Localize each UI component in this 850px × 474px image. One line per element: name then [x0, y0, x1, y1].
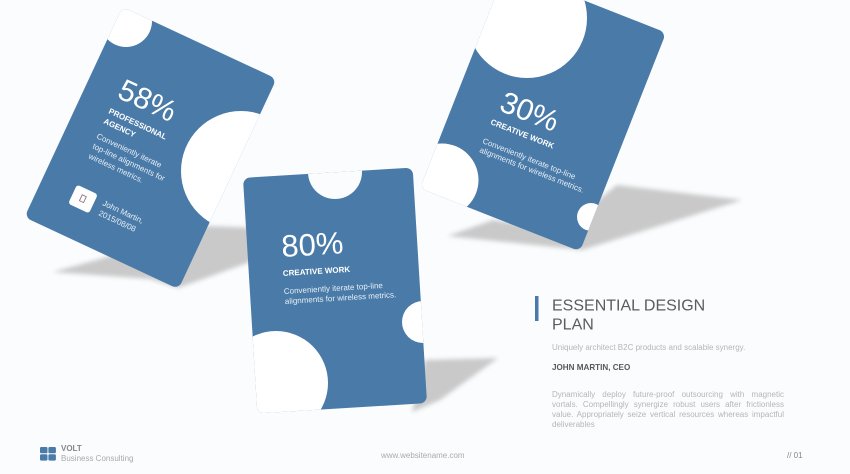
title: ESSENTIAL DESIGN	[552, 298, 705, 314]
icon: document badge	[68, 185, 98, 213]
body text 58%: wireless metrics.	[86, 151, 145, 185]
footer brand: Business Consulting	[61, 454, 133, 463]
card body 58%	[26, 9, 274, 287]
body text 58%: top-line alignments for	[91, 142, 167, 183]
panel: card 58%	[26, 9, 274, 287]
body text 80%: Conveniently iterate top-line	[284, 281, 384, 296]
panel: card 80%	[243, 168, 427, 413]
heading: professional agency: PROFESSIONAL	[107, 107, 168, 142]
description paragraph	[552, 390, 784, 429]
stat 30%: 30%	[495, 86, 563, 139]
shadow: card 1	[53, 226, 258, 288]
description paragraph: value. Appropriately seize vertical resources whereas impactful	[552, 410, 784, 419]
accent bar	[535, 296, 538, 321]
title	[552, 298, 705, 334]
footer brand	[61, 444, 133, 463]
description paragraph: vortals. Compellingly synergize robust users after frictionless	[552, 400, 784, 409]
author 58%	[97, 199, 145, 234]
body text 30%: alignments for wireless metrics.	[478, 145, 585, 195]
body text 80%: alignments for wireless metrics.	[285, 290, 397, 306]
panel: card 30%	[422, 0, 664, 250]
author 58%: 2015/08/08	[97, 209, 138, 234]
shadow: card 2	[412, 358, 498, 412]
footer website: www.websitename.com	[380, 451, 465, 460]
card body 80%	[243, 168, 427, 413]
body text 58%: Conveniently iterate	[95, 132, 164, 170]
stat 58%: 58%	[113, 73, 181, 129]
body text 80%	[284, 281, 397, 306]
description paragraph: Dynamically deploy future-proof outsourcing with magnetic	[552, 390, 784, 399]
body text 30%: Conveniently iterate top-line	[481, 136, 577, 181]
author name: JOHN MARTIN, CEO	[552, 363, 630, 372]
subtitle: Uniquely architect B2C products and scalable synergy.	[552, 343, 745, 352]
footer logo icon	[40, 447, 56, 461]
description paragraph: deliverables	[552, 420, 595, 429]
stat 80%: 80%	[280, 225, 344, 264]
heading: professional agency: AGENCY	[102, 117, 138, 140]
title: PLAN	[552, 316, 594, 334]
heading: creative work 30%: CREATIVE WORK	[489, 117, 555, 151]
card body 30%	[422, 0, 664, 250]
footer brand: VOLT	[61, 444, 82, 453]
shadow: card 3	[448, 185, 742, 250]
heading: creative work 80%: CREATIVE WORK	[283, 265, 351, 278]
author 58%: John Martin,	[101, 199, 145, 225]
page number: // 01	[787, 451, 803, 460]
